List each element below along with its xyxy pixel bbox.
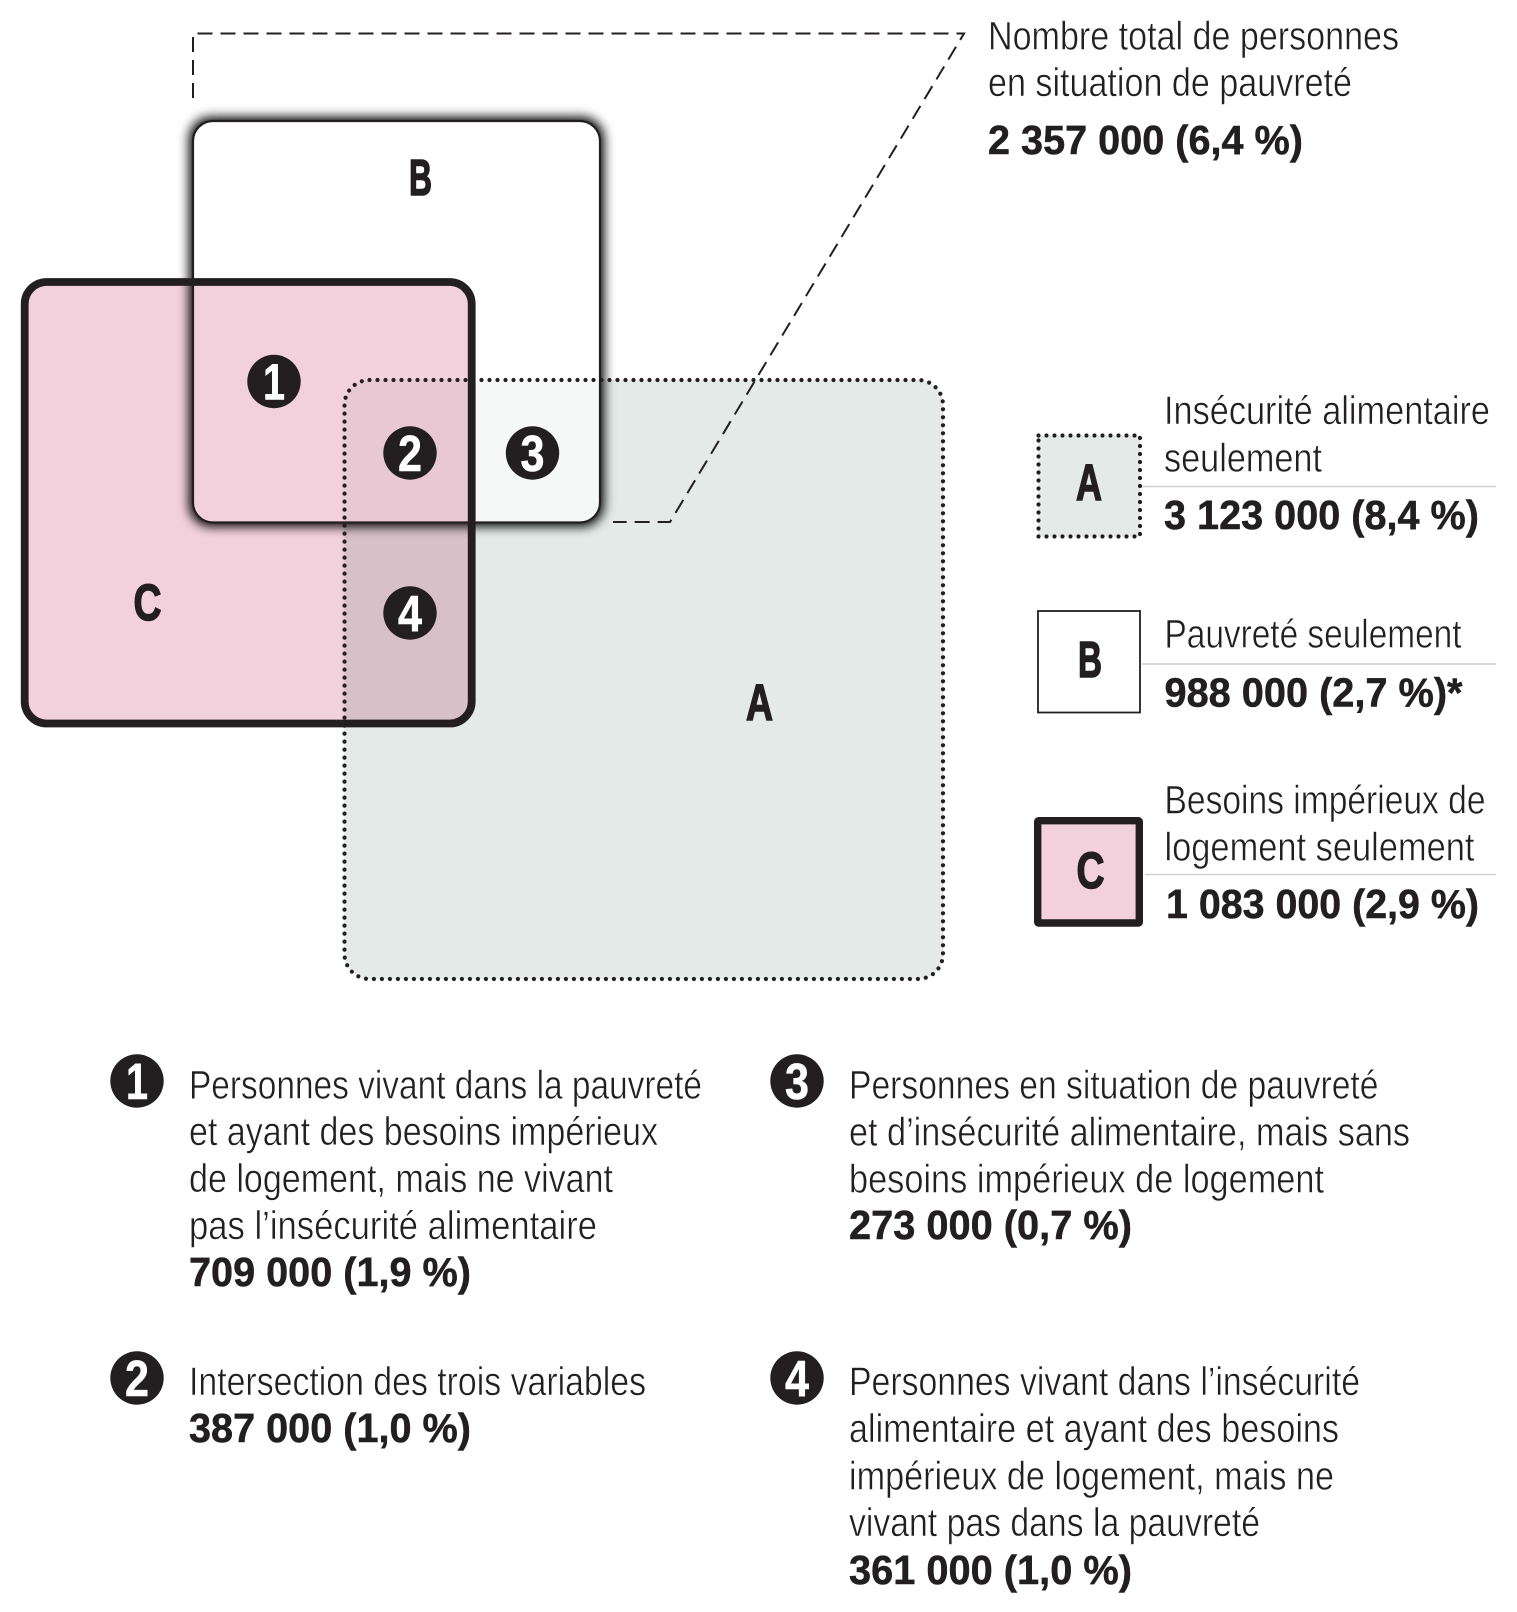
letter A: A	[746, 674, 773, 731]
set B: shadow around poverty square	[189, 117, 604, 526]
legend text B	[1142, 612, 1496, 716]
dashed bracket linking poverty square to total	[193, 34, 964, 522]
note 3	[770, 1053, 1410, 1248]
note 2 marker: 2	[125, 1350, 149, 1407]
note 1	[110, 1053, 702, 1295]
note 4 text: Personnes vivant dans l’insécurité	[849, 1360, 1360, 1404]
legend text A: 3 123 000 (8,4 %)	[1164, 492, 1479, 538]
legend swatch C	[1038, 821, 1139, 923]
note 1 text: et ayant des besoins impérieux	[189, 1110, 658, 1154]
legend text C: logement seulement	[1164, 826, 1474, 870]
note 2 text	[189, 1360, 646, 1451]
note 2	[110, 1350, 646, 1451]
marker 2: 2	[398, 425, 422, 482]
note 4 marker: 4	[785, 1350, 810, 1407]
letter B: B	[409, 149, 432, 206]
marker 2	[383, 425, 437, 482]
note 1 text: pas l’insécurité alimentaire	[189, 1204, 597, 1248]
set A: food insecurity square fill	[344, 380, 943, 979]
legend item C	[1038, 778, 1496, 927]
note 4 text: alimentaire et ayant des besoins	[849, 1407, 1339, 1451]
total poverty callout: Nombre total de personnes	[988, 14, 1399, 58]
legend text C	[1145, 778, 1496, 927]
note 3 text: 273 000 (0,7 %)	[849, 1202, 1132, 1248]
marker 3	[506, 425, 559, 482]
note 3 text	[849, 1064, 1410, 1248]
legend text B: 988 000 (2,7 %)*	[1164, 670, 1463, 716]
note 1 text: Personnes vivant dans la pauvreté	[189, 1064, 702, 1108]
note 1 text: de logement, mais ne vivant	[189, 1157, 613, 1201]
venn diagram	[25, 117, 943, 979]
set C thick outline	[25, 282, 472, 724]
note 2 marker	[110, 1350, 164, 1407]
note 1 text: 709 000 (1,9 %)	[189, 1249, 471, 1295]
legend text C: 1 083 000 (2,9 %)	[1166, 881, 1479, 927]
note 4 marker	[770, 1350, 824, 1407]
note 1 text	[189, 1064, 702, 1295]
legend item B	[1038, 611, 1496, 716]
note 3 text: besoins impérieux de logement	[849, 1158, 1324, 1202]
note 1 marker: 1	[126, 1053, 148, 1110]
total poverty callout	[988, 14, 1399, 163]
marker 1: 1	[263, 354, 285, 410]
set B outline	[193, 121, 600, 522]
marker 4: 4	[398, 585, 423, 642]
marker 1	[247, 354, 301, 410]
legend text B: Pauvreté seulement	[1164, 612, 1462, 656]
note 3 marker	[770, 1053, 824, 1110]
set A dotted outline	[344, 380, 943, 979]
total poverty callout: 2 357 000 (6,4 %)	[988, 117, 1303, 163]
note 4	[770, 1350, 1360, 1593]
note 3 text: et d’insécurité alimentaire, mais sans	[849, 1110, 1410, 1154]
legend text A: seulement	[1164, 436, 1322, 480]
legend item A	[1038, 389, 1496, 538]
note 1 marker	[110, 1053, 164, 1110]
total poverty callout: en situation de pauvreté	[988, 61, 1352, 105]
note 4 text	[849, 1360, 1360, 1593]
marker 3: 3	[520, 425, 544, 482]
note 2 text: 387 000 (1,0 %)	[189, 1405, 471, 1451]
note 2 text: Intersection des trois variables	[189, 1360, 646, 1404]
note 4 text: vivant pas dans la pauvreté	[849, 1501, 1260, 1545]
marker 4	[383, 585, 437, 642]
legend swatch A	[1038, 436, 1140, 536]
note 3 marker: 3	[785, 1053, 809, 1110]
letter C: C	[134, 574, 162, 631]
note 4 text: 361 000 (1,0 %)	[849, 1547, 1132, 1593]
legend letter B: B	[1078, 631, 1102, 688]
note 4 text: impérieux de logement, mais ne	[849, 1454, 1334, 1498]
legend text A	[1142, 389, 1496, 538]
set B: poverty square fill with overlaps	[194, 122, 599, 522]
legend letter A: A	[1076, 454, 1102, 511]
legend letter C: C	[1076, 842, 1104, 899]
note 3 text: Personnes en situation de pauvreté	[849, 1064, 1378, 1108]
legend swatch B	[1038, 611, 1140, 712]
set C: core housing need square fill	[28, 286, 468, 720]
